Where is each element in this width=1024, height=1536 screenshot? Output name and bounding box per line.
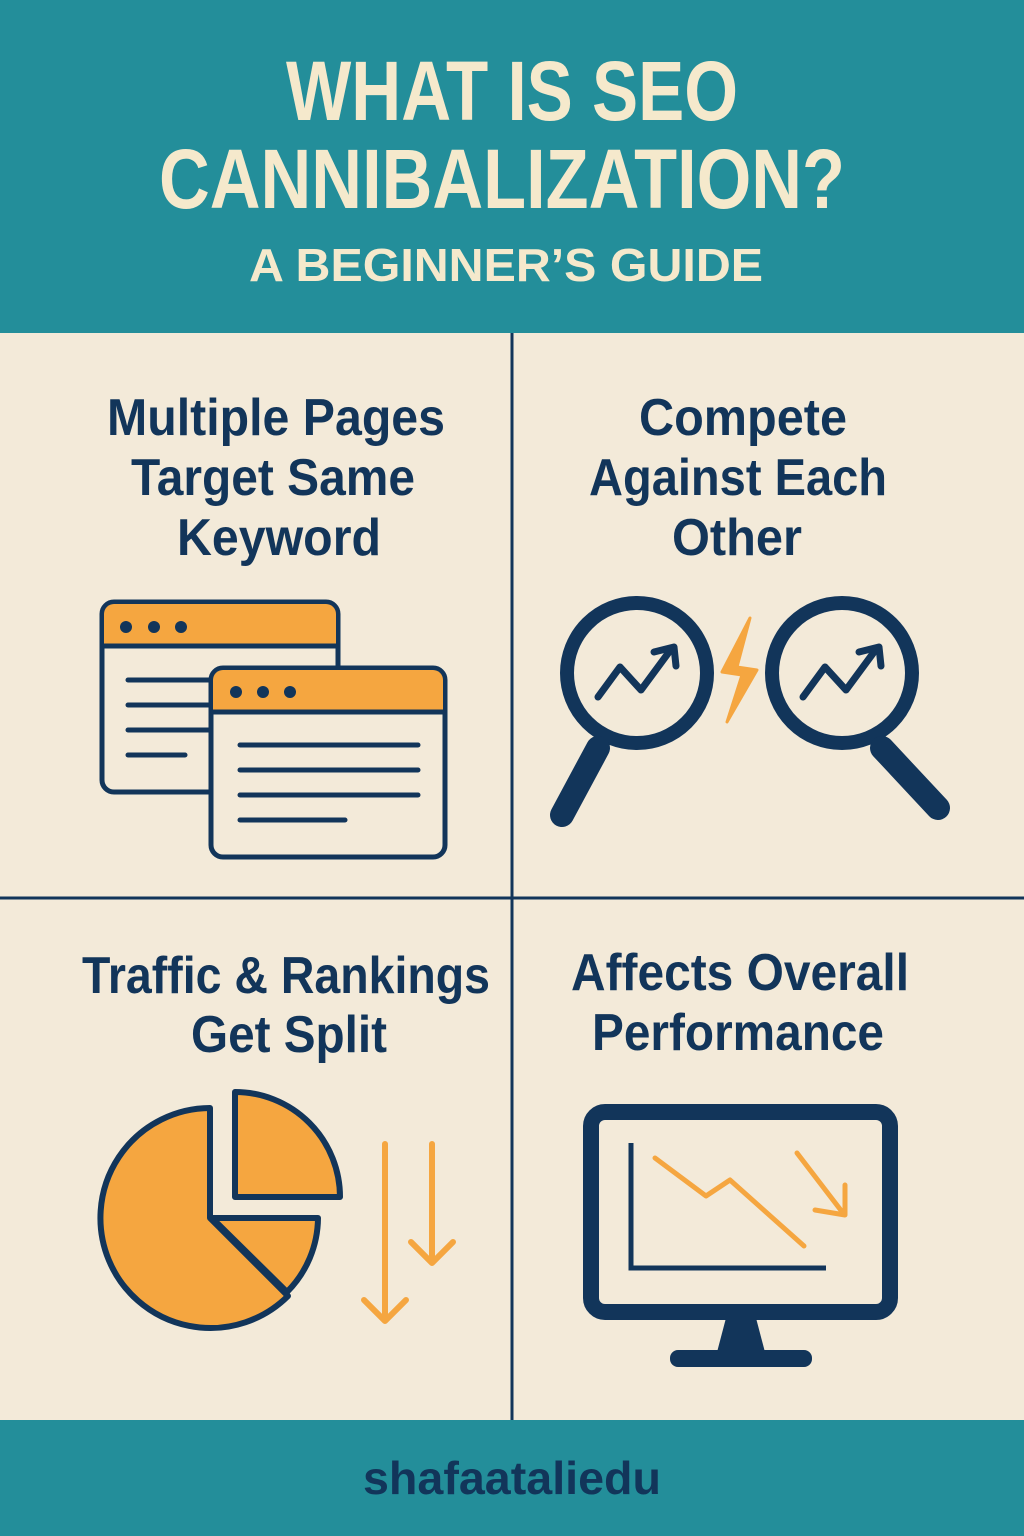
panel: compete [562, 389, 938, 815]
heading: compete: Compete [639, 389, 847, 447]
footer text: shafaataliedu [363, 1452, 661, 1504]
icon: pie chart with arrows [100, 1092, 340, 1328]
heading: compete [589, 389, 887, 567]
title [159, 44, 845, 226]
subtitle: A BEGINNER’S GUIDE [249, 239, 763, 291]
heading: traffic split [82, 947, 490, 1064]
heading: performance: Affects Overall [571, 944, 909, 1002]
title: WHAT IS SEO [286, 44, 738, 138]
panel: performance [571, 944, 909, 1367]
heading: compete: Other [672, 509, 802, 567]
heading: multiple pages [107, 389, 445, 567]
footer band [0, 1420, 1024, 1536]
heading: compete: Against Each [589, 449, 887, 507]
heading: traffic split: Get Split [191, 1006, 387, 1064]
heading: multiple pages: Target Same [131, 449, 415, 507]
icon: magnifiers with bolt [562, 603, 938, 815]
panel: multiple pages [102, 389, 445, 857]
header band [0, 0, 1024, 333]
icon: browser windows [102, 602, 445, 857]
icon: monitor with declining chart [591, 1112, 890, 1367]
panel: traffic split [82, 947, 490, 1328]
heading: multiple pages: Multiple Pages [107, 389, 445, 447]
heading: multiple pages: Keyword [177, 509, 381, 567]
title: CANNIBALIZATION? [159, 132, 845, 226]
heading: performance: Performance [592, 1004, 884, 1062]
heading: performance [571, 944, 909, 1062]
heading: traffic split: Traffic & Rankings [82, 947, 490, 1005]
